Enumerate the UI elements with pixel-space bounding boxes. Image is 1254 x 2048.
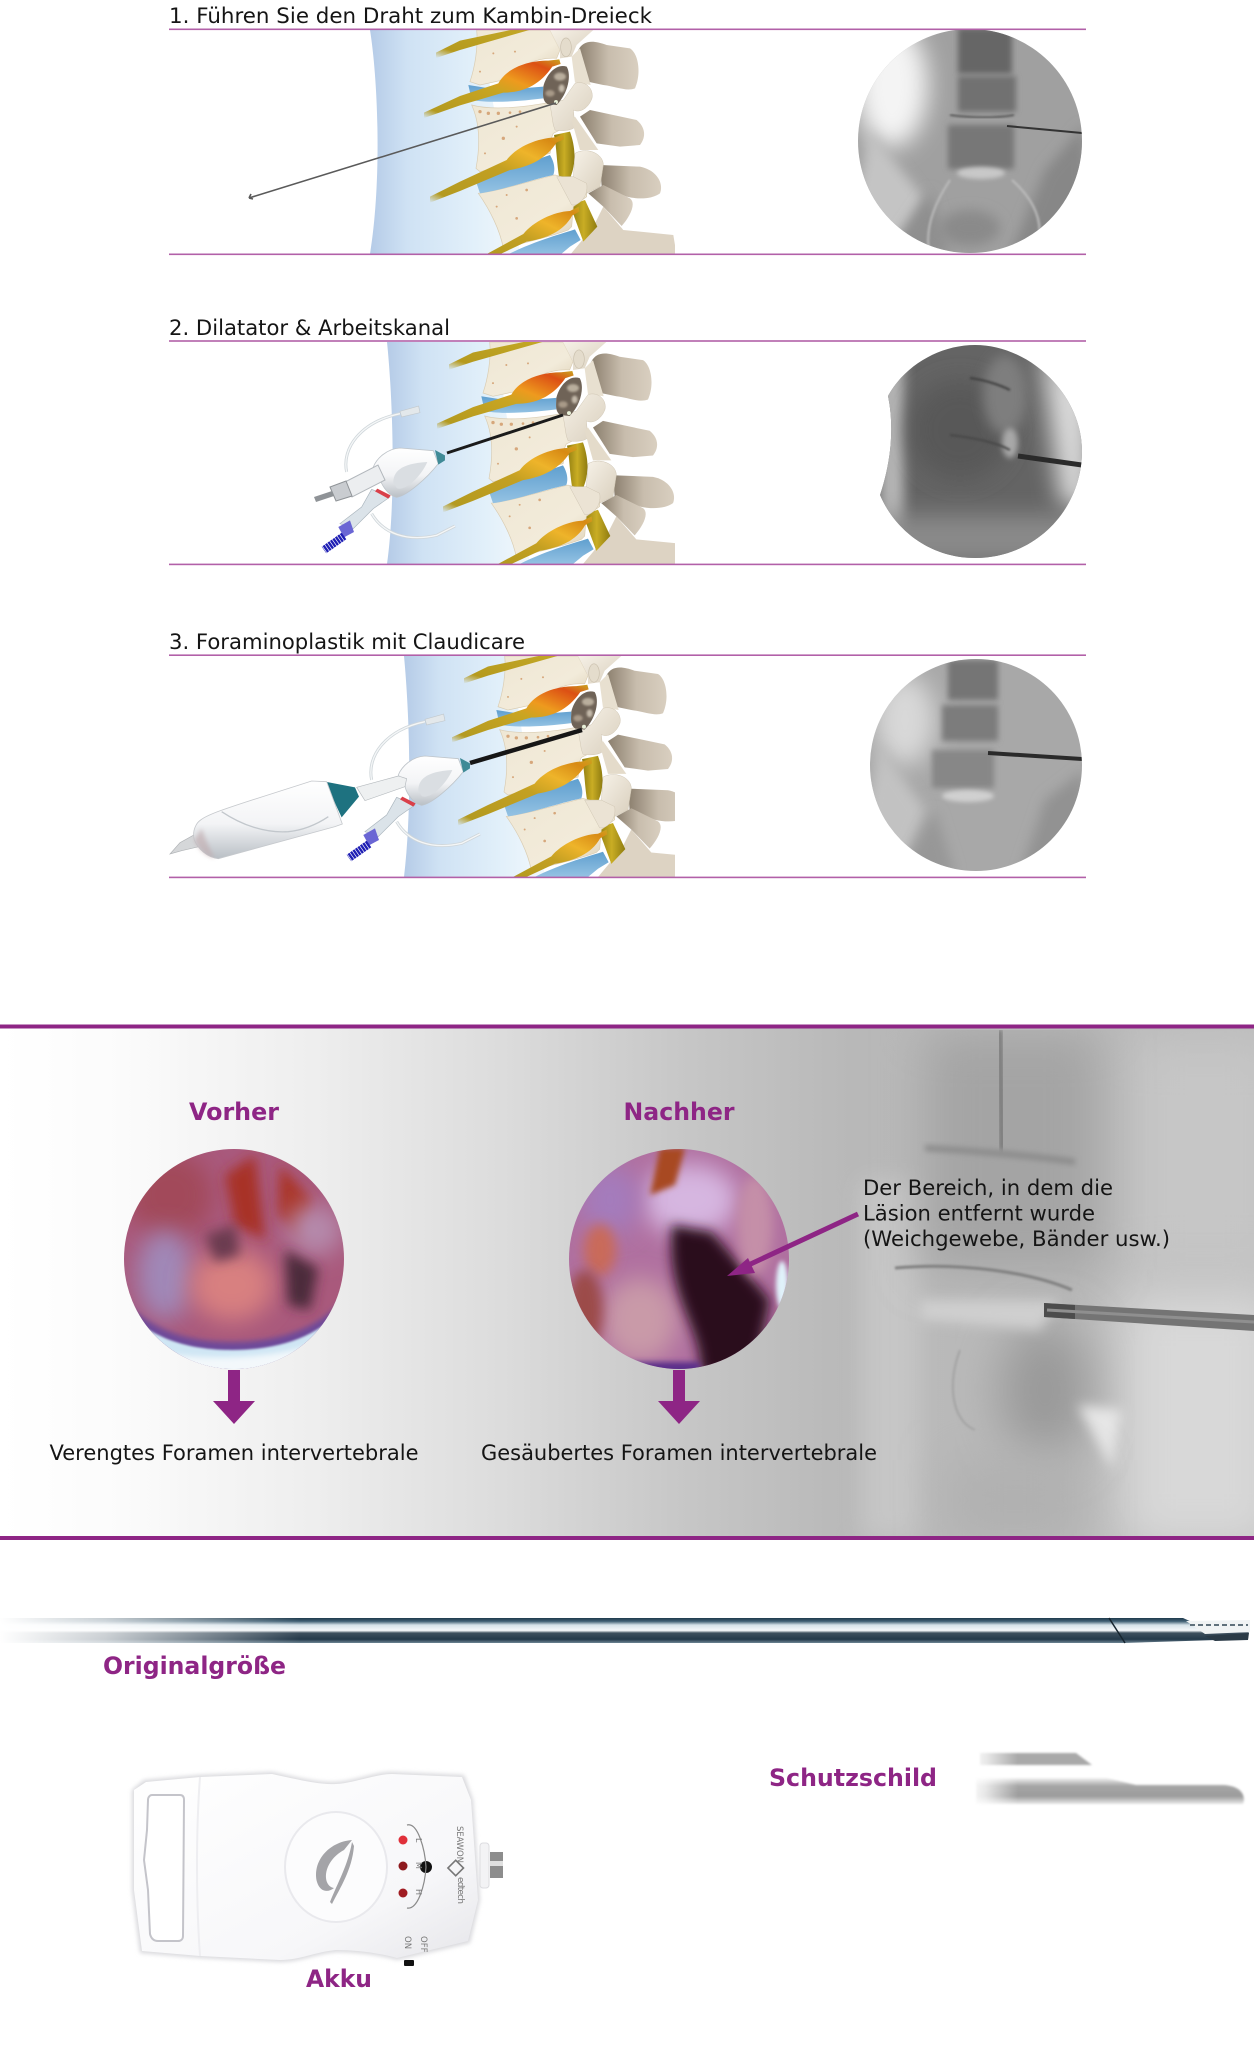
heading: Vorher: Vorher xyxy=(189,1098,279,1126)
step 1 x-ray xyxy=(858,30,1082,253)
endoscope image: before xyxy=(120,1147,350,1375)
band gradient background xyxy=(0,1028,1254,1538)
brand text: H xyxy=(414,1889,423,1895)
background x-ray with instrument xyxy=(860,1030,1254,1550)
power switch xyxy=(404,1960,414,1966)
step 3 spine illustration xyxy=(452,656,675,877)
band rules xyxy=(0,1024,1254,1540)
step 2 working channel xyxy=(447,415,563,453)
logo disc xyxy=(285,1812,387,1922)
step 2 panel xyxy=(169,316,1090,565)
step 1 title: 1. Führen Sie den Draht zum Kambin-Dreieck xyxy=(169,4,653,28)
step 3 panel xyxy=(169,630,1086,878)
step 2 title: 2. Dilatator & Arbeitskanal xyxy=(169,316,450,340)
protective shield xyxy=(968,1748,1244,1808)
step 2 skin band xyxy=(387,342,530,564)
label: Originalgröße: Originalgröße xyxy=(103,1652,286,1680)
arrow: before down to label xyxy=(213,1370,255,1424)
panel: before and after comparison band xyxy=(0,1024,1254,1550)
brand text: edtech xyxy=(455,1877,465,1904)
step 1 spine illustration xyxy=(424,28,677,255)
step 3 x-ray xyxy=(860,658,1084,874)
brand mark xyxy=(448,1860,463,1876)
handle opening xyxy=(144,1795,184,1941)
callout text: Der Bereich, in dem die xyxy=(863,1176,1113,1200)
step 1 panel xyxy=(169,4,1090,255)
label: before: Verengtes Foramen intervertebrale xyxy=(50,1441,418,1465)
callout arrow xyxy=(727,1214,858,1276)
logo mark xyxy=(316,1840,354,1904)
brand text: SEAWON xyxy=(454,1826,464,1863)
step 2 dilator and tubing xyxy=(314,406,455,550)
heading: Nachher: Nachher xyxy=(624,1098,735,1126)
step 2 rules xyxy=(169,340,1086,565)
brand text: L xyxy=(414,1838,423,1843)
step 1 skin band xyxy=(370,30,520,254)
arrow: after down to label xyxy=(658,1370,700,1424)
indicator lamps xyxy=(398,1836,432,1898)
label: Schutzschild: Schutzschild xyxy=(769,1764,937,1792)
step 1 rules xyxy=(169,28,1086,255)
step 3 title: 3. Foraminoplastik mit Claudicare xyxy=(169,630,525,654)
endoscope image: after xyxy=(567,1147,791,1375)
step 1 guide wire xyxy=(249,103,556,199)
step 3 working channel xyxy=(470,730,582,763)
step 2 x-ray xyxy=(878,344,1090,563)
brand text: ON xyxy=(402,1936,412,1949)
brand text xyxy=(402,1826,465,1953)
step 3 claudicare handpiece xyxy=(170,714,480,859)
step 3 rules xyxy=(169,654,1086,878)
brand text: OFF xyxy=(418,1936,428,1953)
claudicare instrument rod xyxy=(0,1616,1250,1646)
battery pack xyxy=(132,1772,503,1966)
lamp bracket xyxy=(407,1825,426,1908)
callout text: Läsion entfernt wurde xyxy=(863,1202,1095,1226)
connector xyxy=(480,1843,503,1888)
step 3 skin band xyxy=(404,656,545,877)
callout text: (Weichgewebe, Bänder usw.) xyxy=(863,1227,1170,1251)
label: Akku: Akku xyxy=(306,1965,372,1993)
step 2 spine illustration xyxy=(437,340,690,564)
label: after: Gesäubertes Foramen intervertebrale xyxy=(481,1441,877,1465)
brand text: M xyxy=(414,1862,423,1869)
